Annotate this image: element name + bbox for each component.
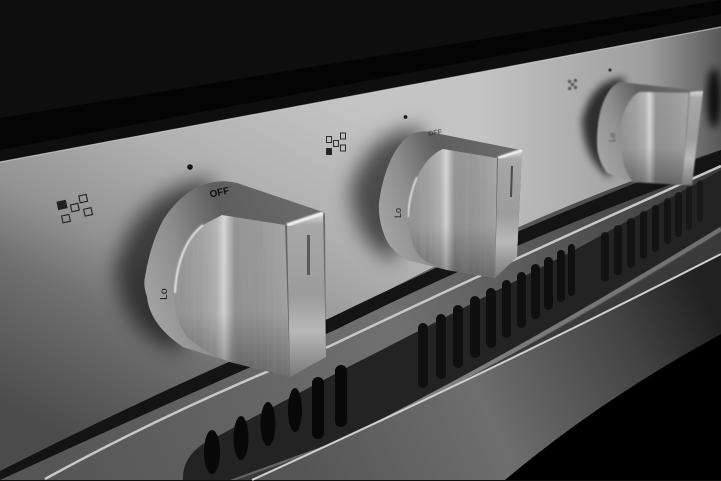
knob face <box>620 92 689 185</box>
vent band <box>183 170 721 480</box>
label: Lo: Lo <box>608 133 617 142</box>
label: OFF: OFF <box>428 129 443 138</box>
knob: first burner <box>144 181 326 380</box>
icon: burner selector 2 <box>326 133 346 154</box>
indicator dot 2 <box>404 115 407 119</box>
vent slots: left group <box>204 365 347 474</box>
knob: second burner <box>379 129 522 280</box>
pointer line <box>511 166 512 197</box>
knob face <box>174 215 290 377</box>
icon: burner selector 1 <box>57 194 93 223</box>
lower rail <box>0 150 721 480</box>
indicator dot 1 <box>187 164 193 170</box>
label: Lo: Lo <box>393 208 403 218</box>
knob pointer strip <box>682 91 703 185</box>
label: OFF: OFF <box>209 186 231 201</box>
indicator dot 3 <box>608 68 612 72</box>
lower trim panel <box>236 233 721 480</box>
knob pointer strip <box>495 150 522 278</box>
knob pointer strip <box>287 213 326 377</box>
pointer line <box>307 235 310 275</box>
icon: burner selector 3 <box>568 79 577 90</box>
label: Lo: Lo <box>158 288 170 300</box>
knob face <box>408 149 497 278</box>
knob shadows on panel <box>115 68 721 352</box>
vent slots: right group <box>418 180 703 388</box>
knob: third burner <box>597 82 703 185</box>
